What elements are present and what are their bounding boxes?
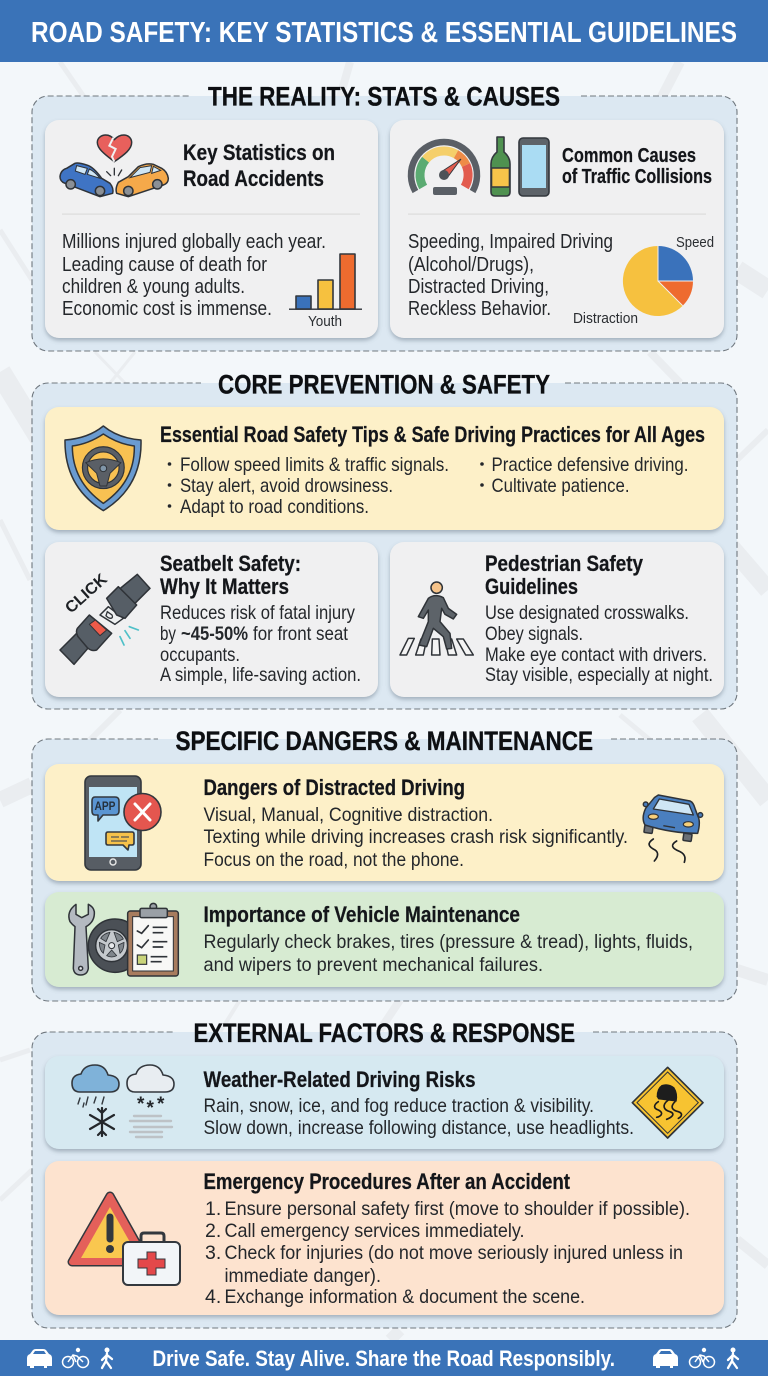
icon: phone xyxy=(519,138,549,196)
icon: weather symbols: * xyxy=(157,1094,165,1115)
card text: immediate danger). xyxy=(224,1265,381,1287)
card text xyxy=(204,1169,690,1308)
icons: car, bike, walker right xyxy=(653,1348,738,1368)
slogan: Drive Safe. Stay Alive. Share the Road Responsibly. xyxy=(152,1346,615,1371)
panel: vehicle maintenance xyxy=(45,892,724,987)
card heading: of Traffic Collisions xyxy=(562,166,712,188)
icon: bottle xyxy=(491,137,510,196)
panel: essential tips xyxy=(45,407,724,530)
card text: Regularly check brakes, tires (pressure & tread), lights, fluids, xyxy=(204,931,693,953)
panel: pedestrian safety xyxy=(390,542,724,697)
body text: ~45-50% xyxy=(181,623,248,645)
tips list right xyxy=(480,454,688,497)
tips list left: Stay alert, avoid drowsiness. xyxy=(180,475,393,497)
body text: Stay visible, especially at night. xyxy=(485,664,713,686)
tips list left xyxy=(168,454,449,518)
heading: the reality: THE REALITY: STATS & CAUSES xyxy=(208,82,560,112)
bar chart: youth xyxy=(289,254,362,330)
card text: 1. xyxy=(205,1198,221,1220)
body text xyxy=(485,602,713,686)
icon: crashed cars and broken heart xyxy=(60,135,168,197)
body text: Leading cause of death for xyxy=(62,253,267,276)
section: the reality stats and causes xyxy=(32,82,737,351)
panel: seatbelt safety xyxy=(45,542,378,697)
body text: Use designated crosswalks. xyxy=(485,602,689,624)
panel: key statistics xyxy=(45,120,378,338)
card text: and wipers to prevent mechanical failures. xyxy=(204,954,543,976)
icon: slippery road sign xyxy=(632,1067,703,1138)
card text: Focus on the road, not the phone. xyxy=(204,849,464,871)
icon: seatbelt buckle xyxy=(60,571,150,664)
body text: A simple, life-saving action. xyxy=(160,664,361,686)
card text xyxy=(204,902,693,976)
icon: phone with app and cross xyxy=(85,776,161,870)
panel: weather risks xyxy=(45,1056,724,1149)
icon: pedestrian on crosswalk xyxy=(400,582,473,655)
icons: car, bike, walker left xyxy=(27,1348,112,1368)
body text xyxy=(62,230,326,320)
pie chart xyxy=(573,234,714,327)
icon: wrench, tire and checklist xyxy=(69,903,178,976)
tips list left: Follow speed limits & traffic signals. xyxy=(180,454,449,476)
card text: Rain, snow, ice, and fog reduce traction & visibility. xyxy=(204,1095,594,1117)
card text xyxy=(204,775,628,871)
card heading: Road Accidents xyxy=(183,166,324,191)
card text: Ensure personal safety first (move to shoulder if possible). xyxy=(224,1198,690,1220)
body text: by xyxy=(160,623,176,645)
body text: Obey signals. xyxy=(485,623,583,645)
icon: bottle label xyxy=(492,168,510,187)
card heading xyxy=(160,551,301,599)
heading: specific dangers: SPECIFIC DANGERS & MAINTENANCE xyxy=(176,726,593,756)
panel: common causes xyxy=(390,120,724,338)
card heading: Key Statistics on xyxy=(183,140,335,165)
body text: Economic cost is immense. xyxy=(62,297,272,320)
card heading xyxy=(183,140,335,191)
card text: Importance of Vehicle Maintenance xyxy=(204,902,520,927)
card text xyxy=(204,1067,634,1139)
body text: Millions injured globally each year. xyxy=(62,230,326,253)
body text: Make eye contact with drivers. xyxy=(485,644,707,666)
body text xyxy=(408,230,613,320)
card heading: Guidelines xyxy=(485,574,578,599)
card text: 2. xyxy=(205,1220,221,1242)
icon: weather symbols: * xyxy=(146,1098,154,1119)
card heading: Why It Matters xyxy=(160,574,289,599)
heading: core prevention: CORE PREVENTION & SAFETY xyxy=(218,370,550,400)
body text: Speeding, Impaired Driving xyxy=(408,230,613,253)
card text: Visual, Manual, Cognitive distraction. xyxy=(204,804,493,826)
card heading xyxy=(485,551,644,599)
section: external factors and response xyxy=(32,1018,737,1328)
card heading: Common Causes xyxy=(562,145,696,167)
body text: Distracted Driving, xyxy=(408,275,549,298)
icon: shield with steering wheel xyxy=(65,426,141,511)
icon: skidding car xyxy=(643,795,703,862)
body text: Reckless Behavior. xyxy=(408,297,551,320)
icon: seatbelt buckle: CLICK xyxy=(62,571,111,617)
body text: for front seat xyxy=(253,623,349,645)
card heading: Pedestrian Safety xyxy=(485,551,644,576)
body text: Reduces risk of fatal injury xyxy=(160,602,355,624)
card text: Call emergency services immediately. xyxy=(224,1220,524,1242)
bar chart: youth: Youth xyxy=(308,313,342,330)
body text: occupants. xyxy=(160,644,240,666)
section: specific dangers and maintenance xyxy=(32,726,737,1001)
body text: (Alcohol/Drugs), xyxy=(408,253,534,276)
card text: Emergency Procedures After an Accident xyxy=(204,1169,571,1194)
body text xyxy=(160,602,361,686)
panel: distracted driving xyxy=(45,764,724,881)
tips list right: Cultivate patience. xyxy=(492,475,630,497)
card text: Dangers of Distracted Driving xyxy=(204,775,465,800)
section: core prevention and safety xyxy=(32,370,737,709)
card text: Weather-Related Driving Risks xyxy=(204,1067,476,1092)
card heading: Seatbelt Safety: xyxy=(160,551,301,576)
pie chart: Distraction xyxy=(573,310,638,327)
card heading xyxy=(562,145,712,188)
pie chart: Speed xyxy=(676,234,714,251)
card text: 4. xyxy=(205,1286,221,1308)
footer banner xyxy=(0,1340,768,1376)
icon: phone with app and cross: APP xyxy=(94,799,116,813)
card text: Exchange information & document the scene. xyxy=(224,1286,585,1308)
card text: 3. xyxy=(205,1242,221,1264)
tips list right: Practice defensive driving. xyxy=(492,454,688,476)
icon: weather symbols: * xyxy=(137,1094,145,1115)
body text: children & young adults. xyxy=(62,275,245,298)
icon: speedometer xyxy=(411,142,477,195)
tips list left: Adapt to road conditions. xyxy=(180,496,369,518)
heading: external factors: EXTERNAL FACTORS & RESPONSE xyxy=(194,1018,575,1048)
card text: Slow down, increase following distance, use headlights. xyxy=(204,1117,634,1139)
icon: weather symbols xyxy=(72,1065,174,1137)
icon: warning triangle and first aid kit xyxy=(72,1196,180,1285)
card text: Texting while driving increases crash risk significantly. xyxy=(204,826,628,848)
header banner xyxy=(0,0,768,62)
card text: Check for injuries (do not move seriously injured unless in xyxy=(224,1242,683,1264)
panel: emergency procedures xyxy=(45,1161,724,1315)
